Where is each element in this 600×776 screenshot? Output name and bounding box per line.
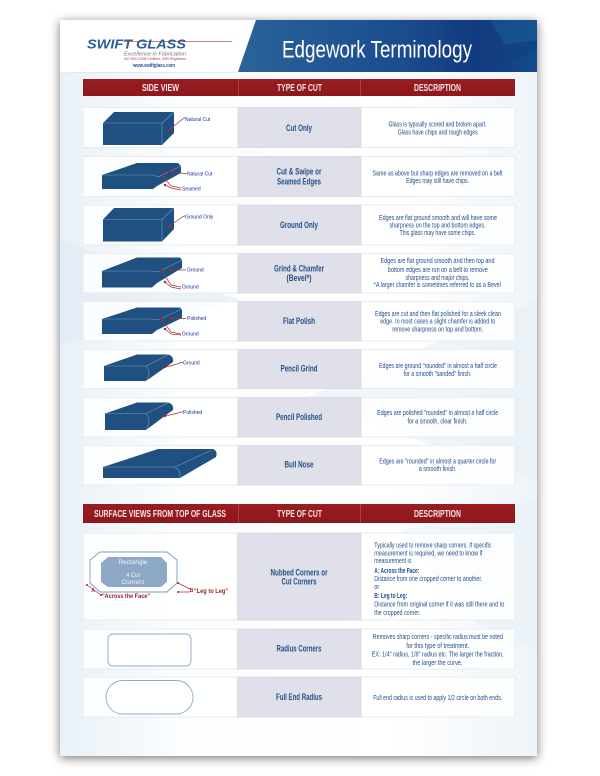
type label: [274, 263, 324, 284]
type label: Flat Polish: [283, 316, 315, 327]
row: Bull Nose: [83, 446, 515, 485]
description: [379, 456, 497, 473]
description: Glass have chips and rough edges: [398, 128, 478, 136]
diagram: ground only: Ground Only: [185, 214, 214, 220]
description: [377, 408, 498, 426]
diagram: octagon corners: 4 Cut: [126, 572, 140, 579]
type label: Grind & Chamfer: [274, 263, 324, 274]
table header: surface views: [83, 504, 515, 523]
type label: Full End Radius: [276, 692, 322, 703]
type label: Seamed Edges: [277, 177, 321, 188]
description: Edges are flat ground smooth and then top and: [380, 256, 494, 265]
description: [388, 120, 486, 136]
description: Edges are polished "rounded" in almost a half circle: [377, 408, 498, 417]
diagram: ground only: [103, 208, 214, 242]
row: Ground Only: [83, 205, 515, 245]
description: for this type of treatment.: [406, 641, 469, 650]
diagram: octagon corners: "Leg to Leg": [194, 588, 228, 595]
description: remove sharpness on top and bottom.: [392, 324, 483, 334]
description: Edges are "rounded" in almost a quarter circle for: [379, 456, 497, 466]
page sheet: [60, 20, 537, 756]
type label: Radius Corners: [276, 644, 322, 655]
company logo: Excellence in Fabrication: [124, 52, 186, 58]
description: bottom edges are run on a belt to remove: [388, 265, 488, 274]
diagram: grind and chamfer: Ground: [187, 268, 204, 274]
description: *A larger chamfer is sometimes referred to as a Bevel: [374, 280, 501, 289]
description: A: Across the Face:: [374, 566, 419, 575]
type label: Nubbed Corners or: [270, 568, 328, 578]
description: [379, 361, 497, 378]
row: Cut & Swipe: [83, 156, 515, 196]
diagram: grind and chamfer: Ground: [182, 284, 199, 290]
diagram: natural cut: Natural Cut: [185, 117, 211, 123]
diagram: bull nose: [103, 449, 217, 478]
diagram: seamed edges: Natural Cut: [187, 172, 213, 178]
type label: [276, 167, 322, 188]
diagram: octagon corners: Rectangle: [118, 559, 148, 566]
diagram: octagon corners: A: [91, 588, 95, 594]
table header: surface views: DESCRIPTION: [414, 509, 461, 520]
description: Edges are ground "rounded" in almost a half circle: [379, 361, 497, 370]
diagram: octagon corners: B: [190, 588, 194, 594]
table header: surface views: TYPE OF CUT: [277, 509, 322, 520]
type label: Pencil Polished: [276, 412, 322, 423]
description: sharpness and major chips.: [406, 273, 470, 282]
description: for a smooth, clear finish.: [408, 416, 468, 426]
row: Cut Only: [83, 108, 515, 148]
row: Pencil Polished: [83, 398, 515, 437]
description: Full end radius is used to apply 1/2 circle on both ends.: [373, 693, 502, 702]
company logo: SWIFT GLASS: [87, 36, 186, 52]
diagram: pencil polished: [105, 402, 202, 430]
type label: (Bevel*): [286, 273, 312, 284]
diagram: flat polish: [102, 308, 206, 338]
description: Distance from original corner if it was still there and to: [374, 600, 504, 608]
diagram: seamed edges: Seamed: [182, 186, 201, 192]
type label: Cut & Swipe or: [276, 167, 322, 178]
table header: side view: DESCRIPTION: [414, 83, 461, 94]
company logo: ISO 9001:2008 Certified, ITAR Registered: [124, 57, 186, 61]
diagram: flat polish: Ground: [182, 332, 199, 338]
type label: Bull Nose: [284, 460, 314, 471]
description: This glass may have some chips.: [400, 228, 476, 237]
description: Same as above but sharp edges are removed on a belt: [372, 168, 503, 178]
row: Grind & Chamfer: [83, 254, 515, 293]
description: [379, 213, 497, 237]
company logo: www.swiftglass.com: [132, 63, 175, 69]
diagram: flat polish: Polished: [187, 316, 206, 322]
title: Edgework Terminology: [282, 36, 472, 64]
description: the larger the curve.: [412, 658, 462, 667]
type label: Ground Only: [280, 220, 318, 231]
description: EX: 1/4" radius, 1/8" radius etc. The larger the fraction,: [372, 650, 504, 658]
row: Nubbed Corners: [83, 533, 515, 620]
table header: side view: SIDE VIEW: [142, 83, 179, 94]
description: [374, 540, 504, 617]
description: Edges are cut and then flat polished for a sleek clean: [375, 309, 501, 318]
diagram: grind and chamfer: [102, 258, 204, 290]
description: Edges may still have chips.: [406, 176, 469, 185]
description: the cropped corner.: [374, 608, 420, 617]
description: sharpness on the top and bottom edges.: [390, 220, 486, 230]
description: measurement is: [374, 556, 411, 565]
description: or: [374, 582, 380, 591]
description: measurement is required, we need to know if: [374, 548, 483, 558]
description: for a smooth "sanded" finish.: [404, 369, 472, 378]
description: Glass is typically scored and broken apart.: [388, 120, 486, 129]
company logo: [87, 36, 232, 69]
type label: Cut Corners: [282, 576, 316, 588]
header banner: [238, 20, 537, 72]
diagram: octagon corners: "Across the Face": [102, 593, 150, 600]
row: Flat Polish: [83, 302, 515, 341]
description: B: Leg to Leg:: [374, 591, 407, 600]
description: [375, 309, 501, 334]
description: a smooth finish.: [419, 464, 457, 473]
diagram: radius corners: [108, 634, 191, 666]
diagram: octagon corners: Corners: [122, 579, 145, 586]
table header: side view: [83, 79, 515, 96]
row: Full End Radius: [83, 677, 515, 717]
table header: surface views: SURFACE VIEWS FROM TOP OF GLASS: [94, 509, 226, 520]
description: Edges are flat ground smooth and will have some: [379, 213, 497, 222]
description: edge. In most cases a slight chamfer is added to: [380, 316, 495, 326]
row: Radius Corners: [83, 629, 515, 669]
type label: Cut Only: [286, 123, 312, 134]
row: Pencil Grind: [83, 350, 515, 388]
description: [374, 256, 501, 289]
type label: Pencil Grind: [280, 364, 318, 375]
diagram: octagon corners: [86, 552, 228, 600]
description: [372, 168, 503, 185]
description: Typically used to remove sharp corners. If specific: [374, 540, 491, 550]
diagram: pencil grind: Ground: [183, 360, 200, 366]
diagram: pencil grind: [104, 354, 200, 381]
diagram: pencil polished: Polished: [183, 410, 202, 416]
description: [372, 632, 504, 667]
description: Removes sharp corners - specific radius must be noted: [373, 632, 503, 641]
diagram: natural cut: [103, 112, 211, 145]
type label: [270, 568, 328, 588]
table header: side view: TYPE OF CUT: [277, 83, 322, 94]
diagram: full end radius: [106, 680, 193, 714]
description: Distance from one cropped corner to another.: [374, 574, 482, 583]
diagram: seamed edges: [102, 163, 213, 192]
